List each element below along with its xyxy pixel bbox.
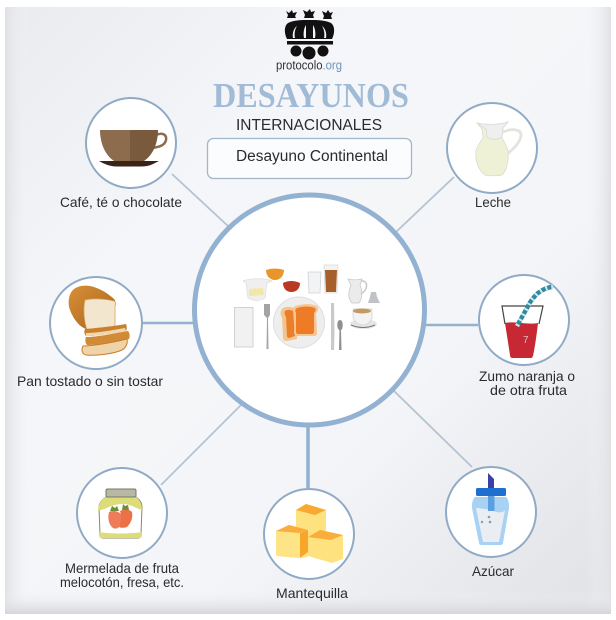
- icon: jam jar: [98, 489, 142, 538]
- icon: jam bowl: [283, 281, 300, 292]
- logo wordmark: protocolo.org: [276, 58, 342, 72]
- icon: toast plate: [274, 297, 324, 348]
- icon: small milk jug: [348, 279, 367, 303]
- central circle: continental breakfast: [194, 195, 424, 425]
- label: Leche: [475, 194, 511, 210]
- icon: sugar bowl: [368, 292, 380, 303]
- node: juice: [479, 275, 575, 398]
- label: [60, 560, 184, 590]
- label: [479, 368, 575, 398]
- icon: spoon: [337, 320, 343, 350]
- label: Pan tostado o sin tostar: [17, 373, 163, 389]
- subtitle: INTERNACIONALES: [236, 117, 382, 134]
- icon: coffee cup: [99, 130, 166, 166]
- label box: Desayuno Continental: Desayuno Continental: [236, 148, 388, 165]
- icon: tea cup: [350, 308, 377, 329]
- node: butter: [264, 489, 354, 601]
- node: sugar: [446, 467, 536, 579]
- icon: sugar dispenser: [472, 473, 509, 545]
- label: Mermelada de fruta: [65, 560, 179, 576]
- icon: bread loaf: [69, 286, 130, 355]
- title: DESAYUNOS: [213, 76, 409, 115]
- icon: crown: [285, 9, 334, 60]
- label box: Desayuno Continental: [208, 138, 412, 178]
- icon: orange bowl: [266, 268, 284, 280]
- icon: milk jug: [476, 122, 521, 176]
- icon: juice glass with straw: 7: [523, 335, 529, 346]
- node: bread: [17, 277, 163, 389]
- icon: butter dish: [243, 279, 272, 300]
- icon: juice glass: [324, 265, 338, 293]
- connector lines: [143, 174, 478, 488]
- icon: napkin: [234, 308, 253, 347]
- label: Zumo naranja o: [479, 368, 575, 384]
- node: jam: [60, 468, 184, 590]
- icon: fork: [264, 304, 270, 349]
- label: Mantequilla: [276, 585, 348, 601]
- icon: water glass: [308, 272, 321, 293]
- label: Café, té o chocolate: [60, 194, 182, 210]
- logo: protocolo.org: [276, 9, 342, 72]
- node: coffee: [60, 98, 182, 210]
- label: Azúcar: [472, 563, 514, 579]
- icon: butter cubes: [276, 504, 343, 563]
- label: de otra fruta: [490, 382, 567, 398]
- label: melocotón, fresa, etc.: [60, 574, 184, 590]
- icon: knife: [331, 303, 334, 350]
- node: milk: [447, 103, 537, 210]
